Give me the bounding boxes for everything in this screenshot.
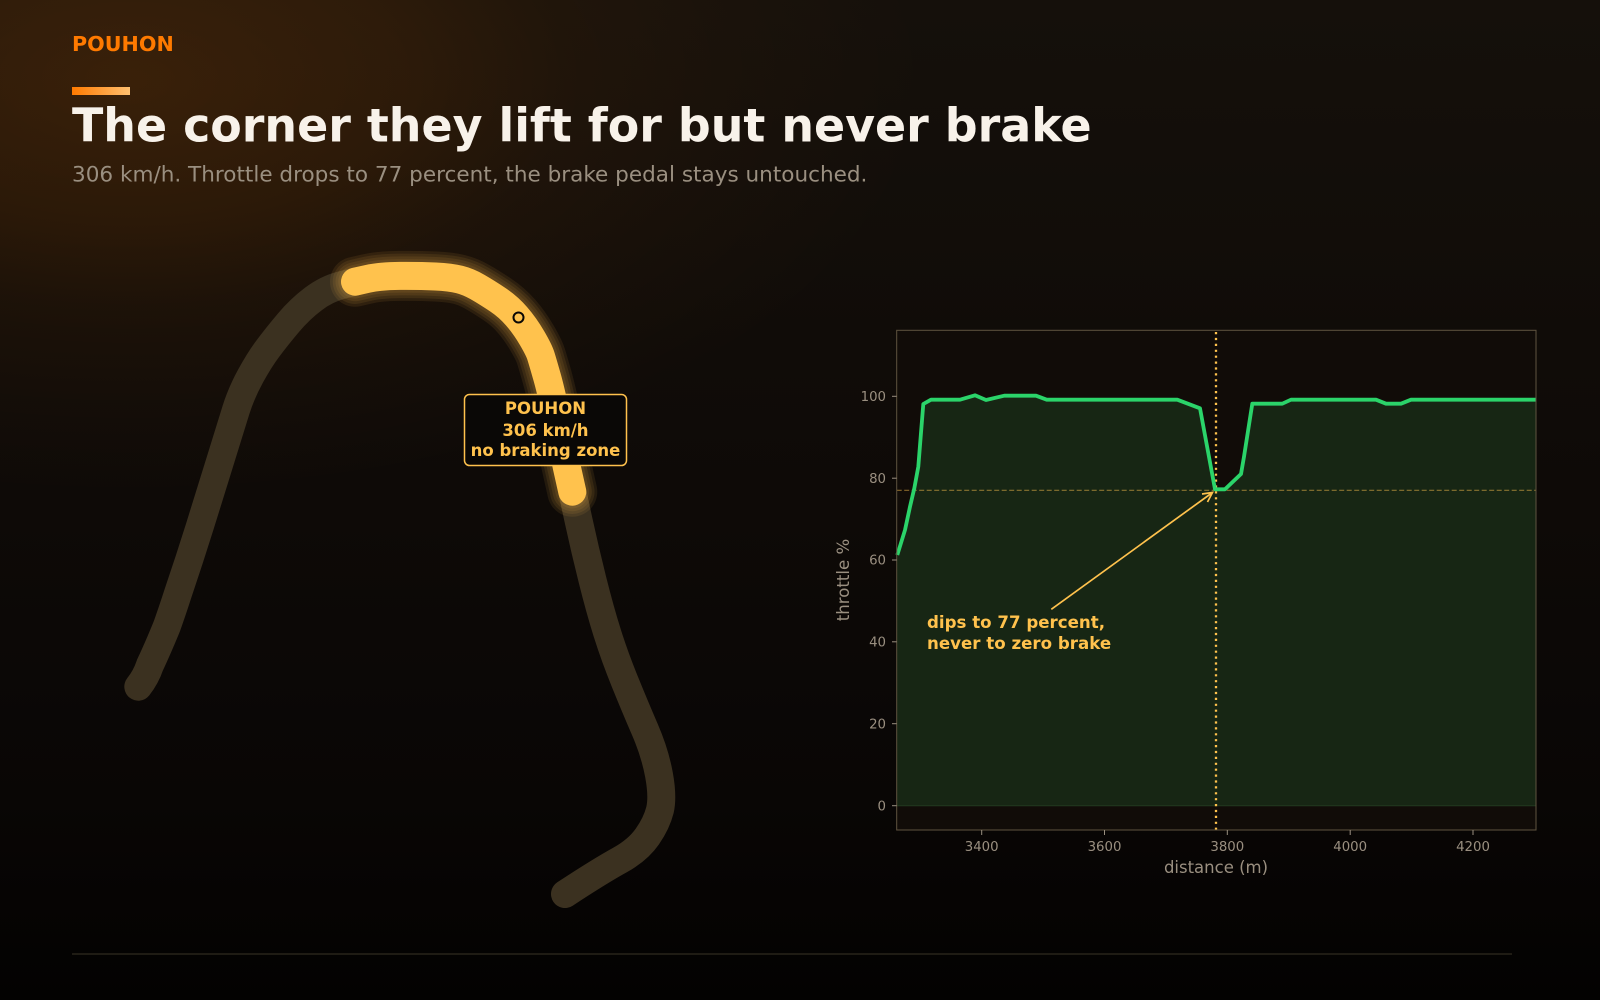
x axis ticks and labels: 3800 xyxy=(1210,840,1244,855)
title: The corner they lift for but never brake xyxy=(72,98,1092,152)
77 percent reference line xyxy=(897,489,1536,491)
corner callout: 306 km/h xyxy=(502,421,589,440)
x axis ticks and labels: 3600 xyxy=(1088,840,1121,855)
throttle line xyxy=(897,395,1536,555)
y axis ticks and labels: 0 xyxy=(878,800,886,814)
annotation arrow xyxy=(1051,492,1212,609)
x axis ticks and labels: 4000 xyxy=(1333,840,1367,855)
full track outline xyxy=(138,282,661,894)
plot background xyxy=(897,330,1536,830)
x axis ticks and labels xyxy=(965,830,1490,855)
subtitle: 306 km/h. Throttle drops to 77 percent, the brake pedal stays untouched. xyxy=(72,162,867,188)
annotation text: dips to 77 percent, xyxy=(927,613,1105,632)
apex distance line xyxy=(1215,332,1217,830)
plot frame xyxy=(897,330,1536,830)
y axis ticks and labels: 80 xyxy=(869,472,886,487)
glow layers xyxy=(355,276,572,492)
x axis ticks and labels: 3400 xyxy=(965,840,999,855)
y axis ticks and labels: 40 xyxy=(869,636,886,650)
x axis title: distance (m) xyxy=(1164,858,1268,877)
x axis ticks and labels: 4200 xyxy=(1456,840,1490,855)
y axis ticks and labels: 20 xyxy=(869,718,886,732)
throttle area xyxy=(897,395,1536,806)
annotation text xyxy=(927,613,1111,653)
apex marker xyxy=(514,312,524,322)
y axis ticks and labels: 100 xyxy=(861,390,886,405)
y axis title: throttle % xyxy=(834,539,853,621)
y axis ticks and labels: 60 xyxy=(869,554,886,569)
accent bar xyxy=(72,87,130,95)
track map xyxy=(138,276,661,894)
corner callout: no braking zone xyxy=(471,441,620,460)
corner callout: POUHON xyxy=(505,399,586,418)
annotation text: never to zero brake xyxy=(927,634,1111,653)
corner callout xyxy=(464,394,626,466)
highlighted corner: Pouhon xyxy=(355,276,572,492)
y axis ticks and labels xyxy=(861,390,897,814)
eyebrow: corner name: POUHON xyxy=(72,32,174,56)
throttle chart xyxy=(834,330,1536,877)
